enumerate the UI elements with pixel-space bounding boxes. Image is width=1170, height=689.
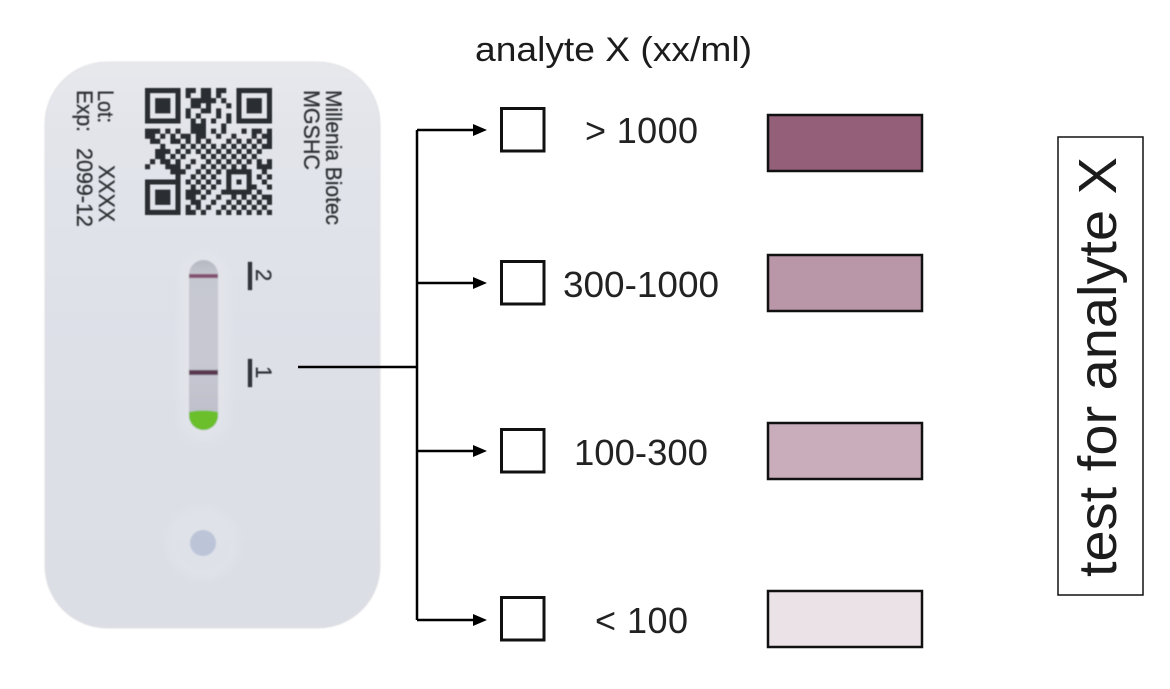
row: 100-300 [502,423,922,479]
sample well [166,506,240,580]
checkbox [502,598,544,640]
test line 2 [189,274,218,278]
row: 300-1000 [502,255,922,311]
cassette printed text: manufacturer [299,90,346,225]
range label: < 100 [595,600,688,641]
panel: test cassette [45,62,380,628]
title: analyte X: analyte X (xx/ml) [475,31,752,69]
side label box: test for analyte X: test for analyte X [1068,157,1128,577]
marker 2 [248,262,276,290]
connector: tree with arrows [298,124,487,626]
range label: > 1000 [585,110,698,151]
cassette printed text: lot and expiry: 2099-12 [72,148,97,227]
cassette printed text: manufacturer: MGSHC [299,90,324,170]
cassette body [45,62,380,628]
row: less than 100 [502,591,922,647]
colour swatch [768,255,922,311]
colour swatch [768,423,922,479]
side label box: test for analyte X [1058,137,1143,595]
marker 1 [248,359,276,387]
icon: QR code [145,91,272,212]
result window strip [178,252,230,442]
marker 2: 2 [251,269,276,281]
checkbox [502,262,544,304]
cassette printed text: lot and expiry [72,90,119,227]
colour swatch [768,591,922,647]
cassette printed text: lot and expiry: Lot: [93,90,118,123]
cassette printed text: lot and expiry: XXXX [94,165,119,222]
test line 1 [189,370,218,375]
green control zone [189,410,218,430]
cassette printed text: lot and expiry: Exp: [72,90,97,132]
checkbox [502,430,544,472]
range label: 300-1000 [563,264,719,305]
row: greater than 1000 [502,108,922,171]
cassette printed text: manufacturer: Millenia Biotec [321,90,346,225]
colour swatch [768,115,922,171]
range label: 100-300 [574,432,708,473]
marker 1: 1 [251,366,276,378]
checkbox [502,108,544,151]
